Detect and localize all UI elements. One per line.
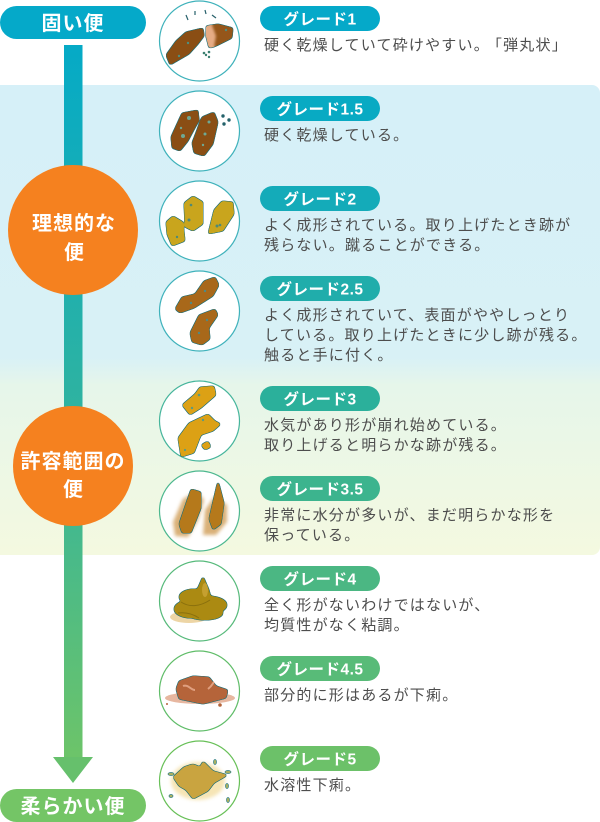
- icon: grade 4.5 mushy mound: [160, 651, 240, 731]
- icon: grade 2 yellow pieces: [160, 181, 240, 261]
- grade 2.5 description: よく成形されていて、表面がややしっとり: [264, 307, 570, 324]
- grade 1 pill: グレード1: [283, 10, 357, 28]
- grade 4 description: 均質性がなく粘調。: [264, 616, 410, 634]
- icon: grade 4 mound: [160, 561, 240, 641]
- grade 1 pill: [260, 6, 380, 31]
- grade 3.5 description: 保っている。: [264, 527, 360, 544]
- badge: ideal stool: 便: [64, 241, 84, 264]
- grade 1 row: [160, 1, 568, 81]
- grade 2 row: [160, 181, 571, 261]
- grade 4 description: 全く形がないわけではないが、: [264, 597, 491, 614]
- grade 3.5 pill: グレード3.5: [276, 480, 364, 498]
- grade 5 row: [160, 741, 380, 821]
- grade 3 row: [160, 381, 507, 461]
- grade 2.5 description: している。取り上げたときに少し跡が残る。: [264, 327, 588, 344]
- icon: grade 1 broken pellets: [160, 1, 240, 81]
- icon: grade 3.5 wet pieces: [160, 471, 240, 551]
- grade 3.5 row: [160, 471, 555, 551]
- grade 3 description: 水気があり形が崩れ始めている。: [264, 417, 507, 434]
- icon: grade 3 soft yellow pieces: [160, 381, 240, 461]
- grade 4 pill: [260, 566, 380, 591]
- grade 2 pill: グレード2: [283, 190, 357, 208]
- icon: grade 5 watery splash: [160, 741, 240, 821]
- grade 3 pill: [260, 386, 380, 411]
- grade 2 pill: [260, 186, 380, 211]
- grade 2 description: よく成形されている。取り上げたとき跡が: [264, 217, 571, 234]
- panel: acceptable range background: [0, 85, 600, 555]
- grade 4.5 pill: [260, 656, 380, 681]
- label: hard stool: 固い便: [42, 12, 104, 35]
- grade 3.5 description: 非常に水分が多いが、まだ明らかな形を: [264, 506, 555, 524]
- grade 1 description: 硬く乾燥していて砕けやすい。「弾丸状」: [264, 37, 568, 54]
- grade 1.5 pill: [260, 96, 380, 121]
- grade 1.5 pill: グレード1.5: [276, 100, 364, 118]
- grade 2.5 pill: グレード2.5: [276, 280, 364, 298]
- grade 4 row: [160, 561, 491, 641]
- grade 3.5 description: [264, 506, 555, 544]
- grade 4.5 pill: グレード4.5: [276, 660, 364, 678]
- badge: acceptable stool: [13, 406, 133, 526]
- grade 3 pill: グレード3: [283, 390, 357, 408]
- grade 5 description: 水溶性下痢。: [264, 777, 361, 794]
- grade 3 description: 取り上げると明らかな跡が残る。: [264, 437, 507, 454]
- grade 4 pill: グレード4: [283, 570, 357, 588]
- badge: ideal stool: [8, 165, 138, 295]
- grade 2.5 description: 触ると手に付く。: [264, 347, 394, 364]
- grade 5 pill: [260, 746, 380, 771]
- grade 4.5 row: [160, 651, 458, 731]
- grade 4 description: [264, 597, 491, 634]
- label: soft stool: [0, 789, 146, 822]
- grade 4.5 description: 部分的に形はあるが下痢。: [264, 687, 458, 704]
- label: hard stool: [0, 6, 146, 39]
- grade 2 description: [264, 217, 571, 254]
- arrow: hard to soft scale: [53, 45, 93, 783]
- grade 2.5 row: [160, 271, 588, 364]
- grade 1.5 description: 硬く乾燥している。: [264, 127, 409, 144]
- label: soft stool: 柔らかい便: [20, 795, 126, 818]
- grade 2.5 pill: [260, 276, 380, 301]
- grade 5 pill: グレード5: [283, 750, 357, 768]
- badge: ideal stool: 理想的な: [32, 212, 116, 235]
- icon: grade 2.5 brown pieces: [160, 271, 240, 351]
- grade 2 description: 残らない。蹴ることができる。: [264, 237, 491, 254]
- badge: acceptable stool: 便: [63, 478, 83, 501]
- grade 3.5 pill: [260, 476, 380, 501]
- grade 1.5 row: [160, 91, 409, 171]
- grade 3 description: [264, 417, 507, 454]
- icon: grade 1.5 dark lumps: [160, 91, 240, 171]
- badge: acceptable stool: 許容範囲の: [20, 450, 126, 473]
- grade 2.5 description: [264, 307, 588, 364]
